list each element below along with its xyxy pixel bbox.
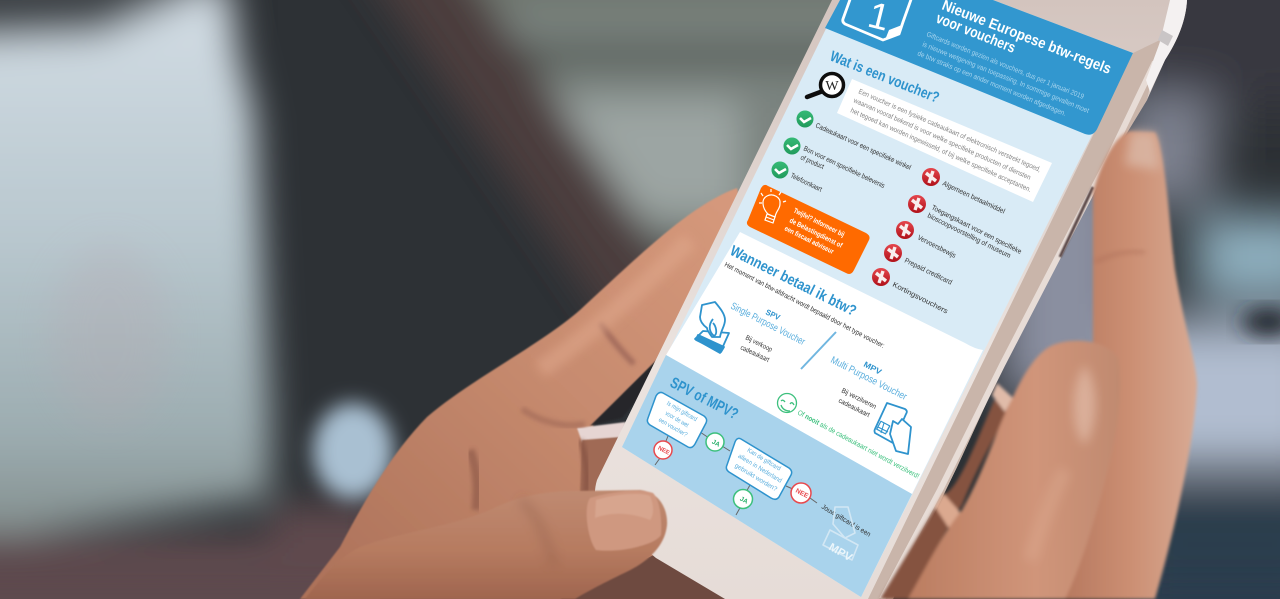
- result text: Jouw giftcard is een: [820, 504, 872, 539]
- flow box 2: gebruikt worden?: [733, 462, 778, 493]
- list: no vouchers: [872, 168, 1023, 316]
- cross items text: Algemeen betaalmiddel: [941, 179, 1007, 216]
- flow box 1: Is mijn giftcard: [665, 400, 698, 423]
- MPV column: Bij verzilveren: [840, 388, 877, 411]
- icon: cross 1: [922, 168, 940, 186]
- definition box: het tegoed kan worden ingewisseld, of bij welke specifieke acceptanten.: [849, 107, 1032, 194]
- right hand fingers beside phone: [880, 131, 1197, 599]
- flow box 1: [647, 392, 707, 448]
- definition box: waarvan vooraf bekend is voor welke specifieke producten of diensten: [851, 97, 1032, 182]
- icon: cross 5: [872, 268, 890, 286]
- cross items text: Toegangskaart voor een specifieke: [930, 203, 1023, 256]
- SPV column: SPV: [764, 308, 782, 322]
- icon: check 1: [796, 110, 814, 128]
- intro text: is nieuwe wetgeving van toepassing. In sommige gevallen moet: [921, 40, 1091, 115]
- checklist: vouchers: [772, 110, 913, 194]
- finger 2: [908, 341, 1120, 599]
- thumb nail: [587, 491, 661, 551]
- back fingers: [880, 388, 1013, 599]
- cross items text: bioscoopvoorstelling of museum: [926, 211, 1012, 260]
- text: btw moment: Het moment van btw-afdracht wordt bepaald door het type voucher:: [723, 262, 885, 350]
- cross items text: Prepaid creditcard: [903, 256, 954, 287]
- icon: magnifier with W: W: [825, 79, 839, 94]
- intro text: de btw straks op een ander moment worden afgedragen.: [916, 49, 1068, 118]
- connector lines: [655, 432, 817, 515]
- callout: orange advice box: een fiscaal adviseur: [783, 224, 836, 256]
- phone body: [595, 0, 1187, 599]
- check items text: of product: [799, 153, 826, 171]
- icon: smiley: [778, 394, 796, 412]
- blue section: [622, 355, 912, 597]
- white section: [666, 232, 983, 494]
- cross items text: Vervoersbewijs: [916, 233, 958, 260]
- note: nooit: Of nooit als de cadeaukaart niet wordt verzilverd!: [796, 408, 921, 481]
- badge: NEE 2: [791, 483, 811, 503]
- icon: MPV card watermark: MPV: [826, 541, 855, 564]
- icon: phone with gift in hand (MPV): [874, 403, 911, 454]
- heading: wanneer betaal ik btw: Wanneer betaal ik btw?: [727, 242, 859, 320]
- SPV column: Bij verkoop: [744, 335, 773, 354]
- icon: cross 3: [896, 221, 914, 239]
- callout: orange advice box: [747, 185, 870, 274]
- icon: check 3: [772, 162, 788, 178]
- flow box 2: [726, 438, 792, 499]
- check items text: Telefoonkaart: [789, 171, 824, 194]
- flow box 2: alleen in Nederland: [737, 453, 783, 485]
- badge: JA 1: JA: [710, 439, 721, 449]
- check items text: Bon voor een specifieke belevenis: [802, 144, 887, 190]
- MPV column: cadeaukaart: [837, 398, 871, 419]
- icon: cross 4: [884, 244, 902, 262]
- icon: light bulb: [759, 189, 786, 223]
- icon: hand with card (SPV): [695, 302, 729, 353]
- flow box 1: een voucher?: [657, 417, 689, 439]
- SPV column: Single Purpose Voucher: [729, 301, 807, 348]
- MPV column: Multi Purpose Voucher: [829, 355, 909, 403]
- finger 1: [1060, 131, 1197, 599]
- badge: NEE 2: NEE: [794, 487, 810, 500]
- thumb over phone: [305, 490, 667, 599]
- icon: magnifier with W: [807, 74, 844, 97]
- check items text: Cadeaukaart voor een specifieke winkel: [814, 121, 913, 172]
- left hand behind the phone: [300, 188, 740, 599]
- cross items text: Kortingsvouchers: [891, 280, 950, 316]
- icon: calendar page with number 1: [843, 0, 913, 40]
- icon: check 2: [784, 138, 800, 154]
- badge: JA 2: [734, 490, 752, 508]
- icon: cross 2: [908, 195, 926, 213]
- title: voor vouchers: [934, 10, 1018, 57]
- badge: NEE 1: [654, 441, 672, 459]
- MPV column: MPV: [862, 360, 884, 377]
- callout: orange advice box: Twijfel? Informeer bij: [792, 206, 846, 239]
- heading: SPV of MPV: SPV of MPV?: [667, 374, 741, 423]
- badge: JA 2: JA: [738, 496, 749, 506]
- flow box 1: voor de wet: [664, 410, 690, 429]
- phone screen: infographic: [622, 0, 1133, 597]
- flow box 2: Kan de giftcard: [746, 447, 782, 473]
- heading: wat is een voucher: Wat is een voucher?: [828, 48, 942, 107]
- badge: JA 1: [706, 433, 724, 451]
- header panel: [825, 0, 1133, 135]
- badge: NEE 1: NEE: [657, 446, 670, 457]
- SPV column: cadeaukaart: [739, 344, 770, 364]
- screen background section: [622, 0, 1133, 597]
- cross items text: [891, 179, 1023, 316]
- callout: orange advice box: de Belastingdienst of: [788, 216, 844, 250]
- definition box: Een voucher is een fysieke cadeaukaart of elektronisch verstrekt tegoed,: [857, 88, 1042, 174]
- icon: MPV card watermark: [823, 507, 858, 564]
- flowchart: [647, 392, 872, 539]
- intro text: Giftcards worden gezien als vouchers, dus per 1 januari 2019: [925, 30, 1085, 101]
- check items text: [789, 121, 913, 194]
